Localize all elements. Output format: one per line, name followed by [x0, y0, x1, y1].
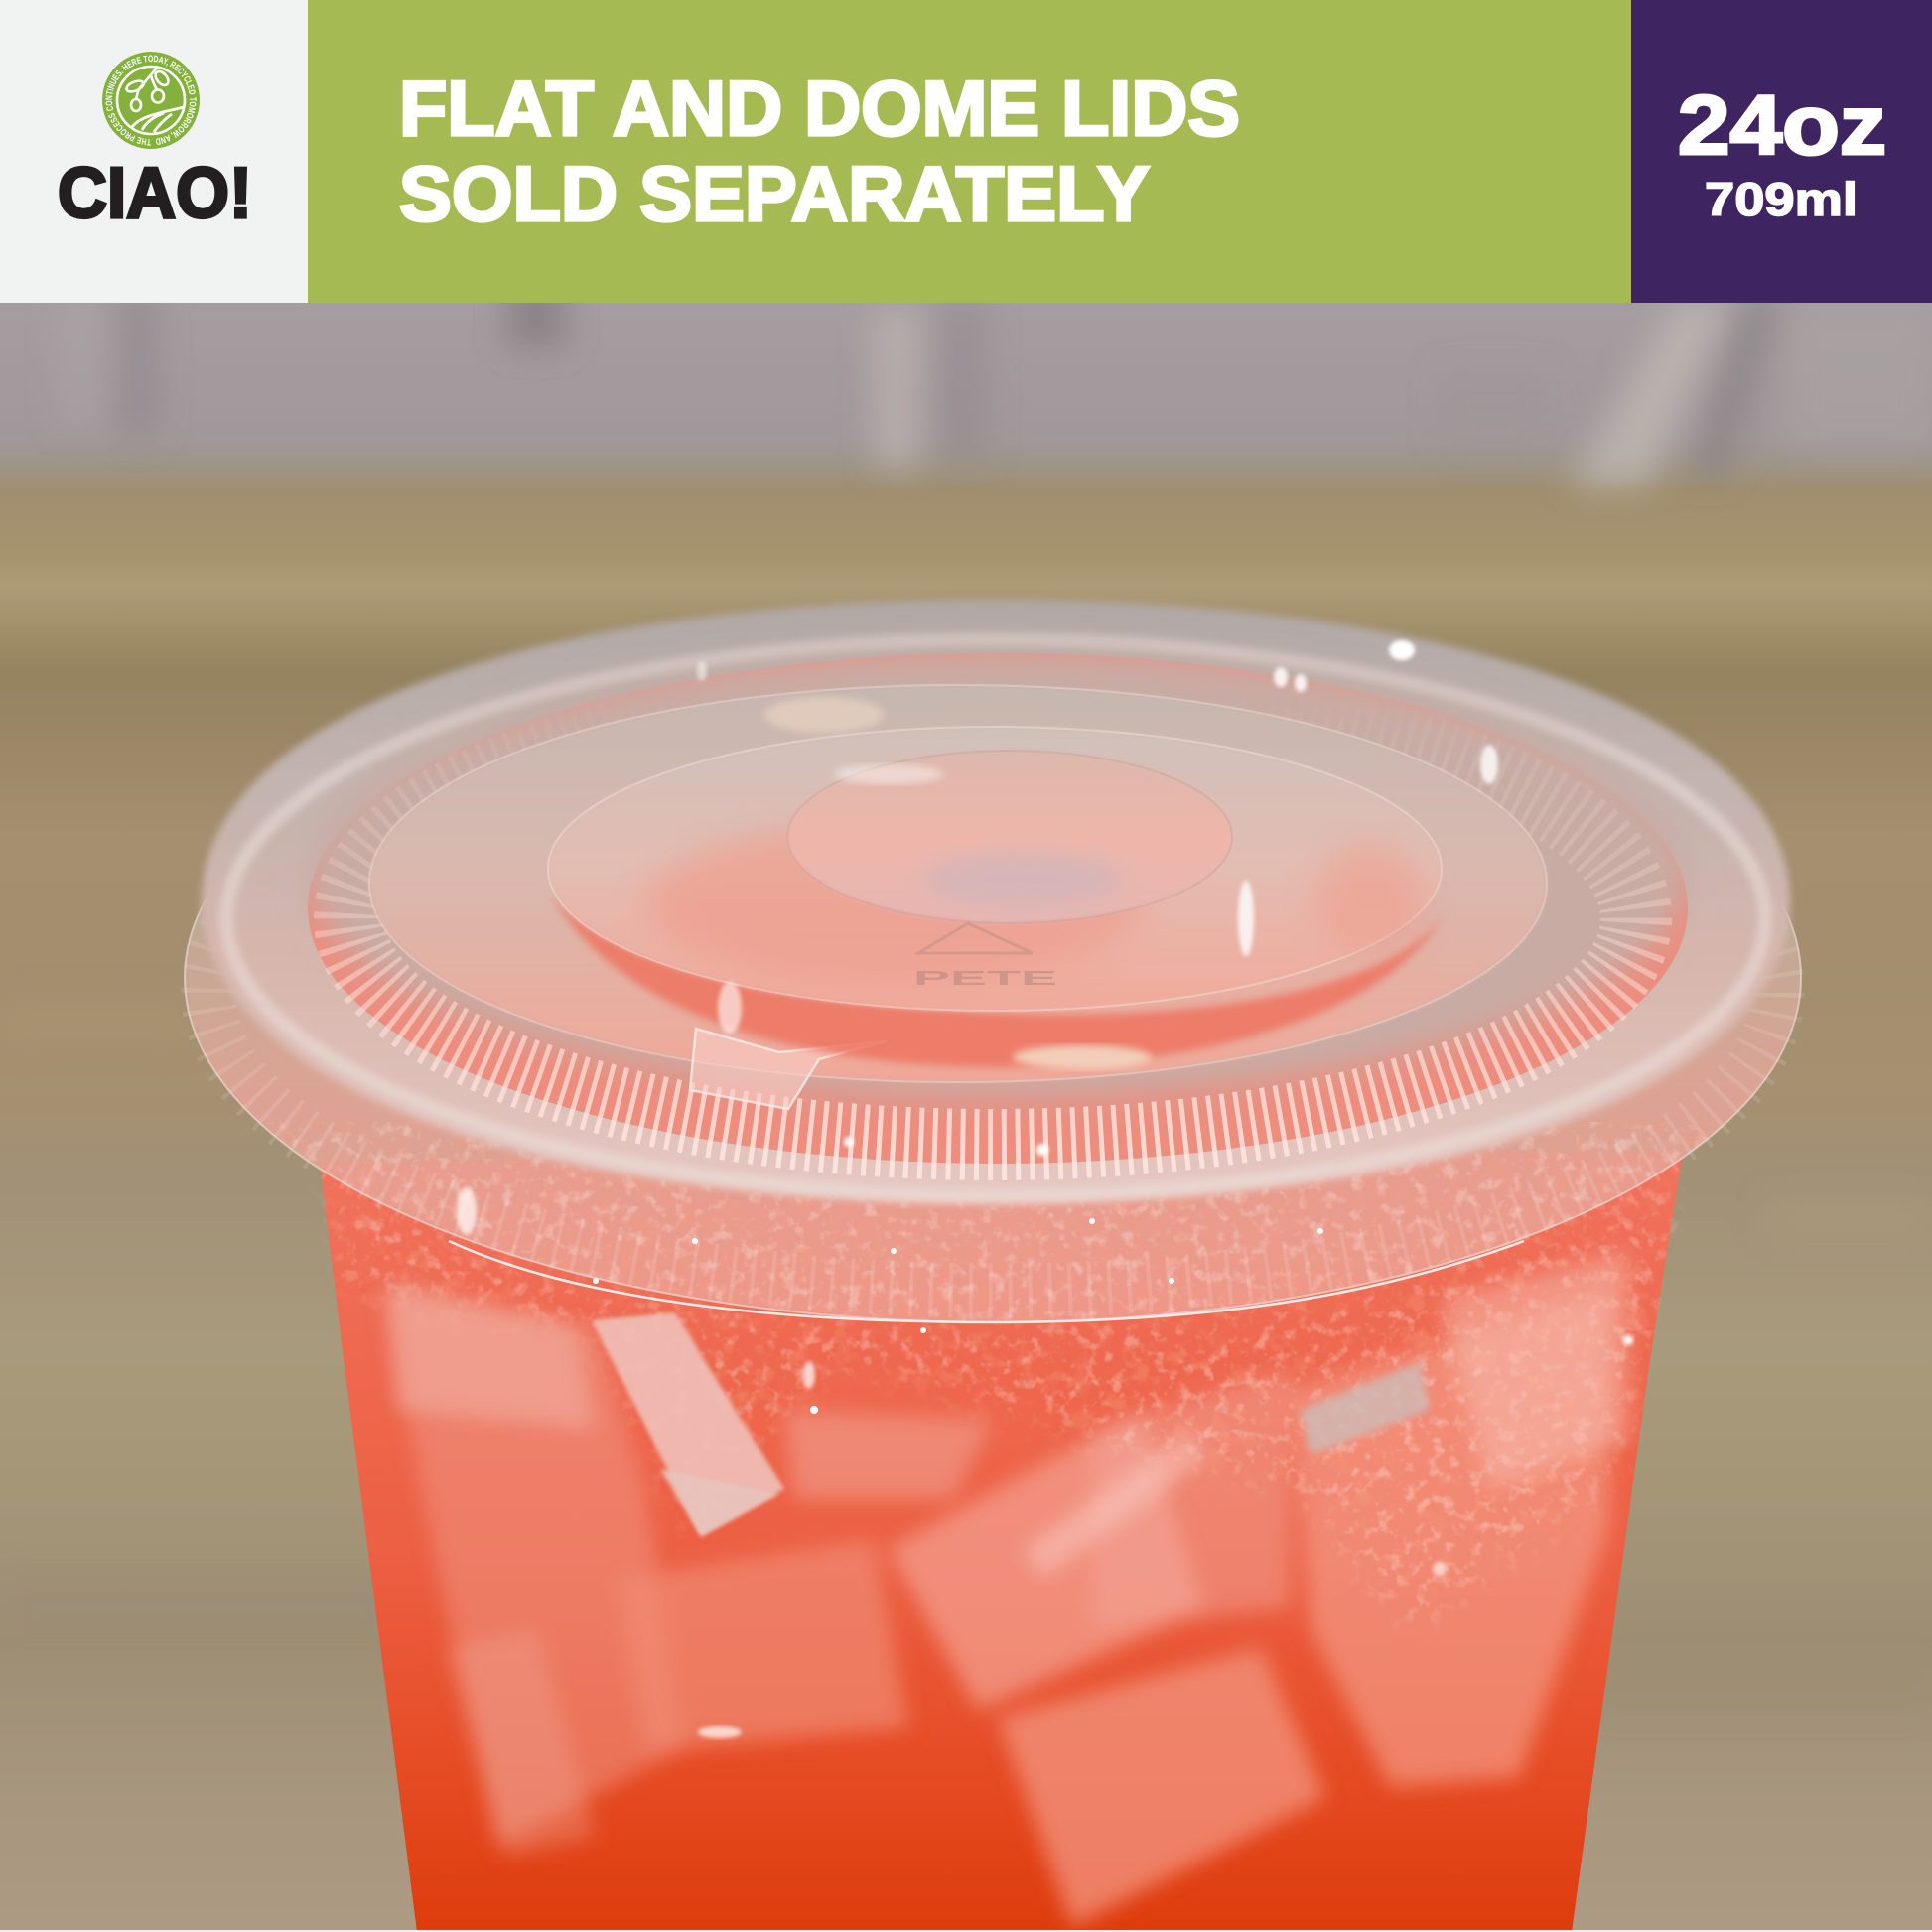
icon: recycling badge: THE PROCESS CONTINUES. HERE TODAY, RECYCLED TOMORROW, AND — [105, 55, 197, 146]
red interior of dome — [645, 824, 1142, 983]
lower rim line of flange — [449, 1241, 1524, 1322]
embossed text on lid: PETE — [913, 968, 1057, 990]
lid — [202, 600, 1790, 1203]
lower red reflection — [551, 894, 1445, 1067]
flat plateau — [369, 685, 1547, 1082]
flange ribs — [208, 695, 1777, 1291]
recessed centre — [787, 751, 1232, 923]
recycle triangle mark — [918, 923, 1033, 953]
headline line 2: SOLD SEPARATELY — [399, 150, 1150, 237]
headline line 1: FLAT AND DOME LIDS — [399, 65, 1240, 152]
cup flange — [185, 633, 1801, 1322]
highlights and sparkles — [457, 640, 1633, 1738]
logo wordmark: CIAO! — [58, 154, 252, 233]
size in ounces: 24oz — [1678, 78, 1886, 172]
header band — [0, 0, 1932, 303]
outer lid rim — [202, 600, 1790, 1203]
ridged band — [308, 653, 1688, 1164]
size in millilitres: 709ml — [1705, 173, 1858, 225]
panel: size — [1631, 0, 1932, 303]
red drink body — [320, 1152, 1683, 1932]
dome — [548, 727, 1442, 1011]
flange sparkle texture — [268, 1122, 1706, 1320]
ice cubes — [298, 1162, 1688, 1926]
sharp ice shard — [387, 1251, 1628, 1579]
panel: headline — [308, 0, 1631, 303]
drink cup with red liquid and ice — [185, 600, 1801, 1932]
bottom edge line — [0, 1930, 1932, 1932]
flange outline — [185, 633, 1801, 1322]
panel: logo — [0, 0, 308, 303]
sparkling upper ice texture — [298, 1162, 1688, 1638]
sip notch — [690, 1029, 887, 1109]
